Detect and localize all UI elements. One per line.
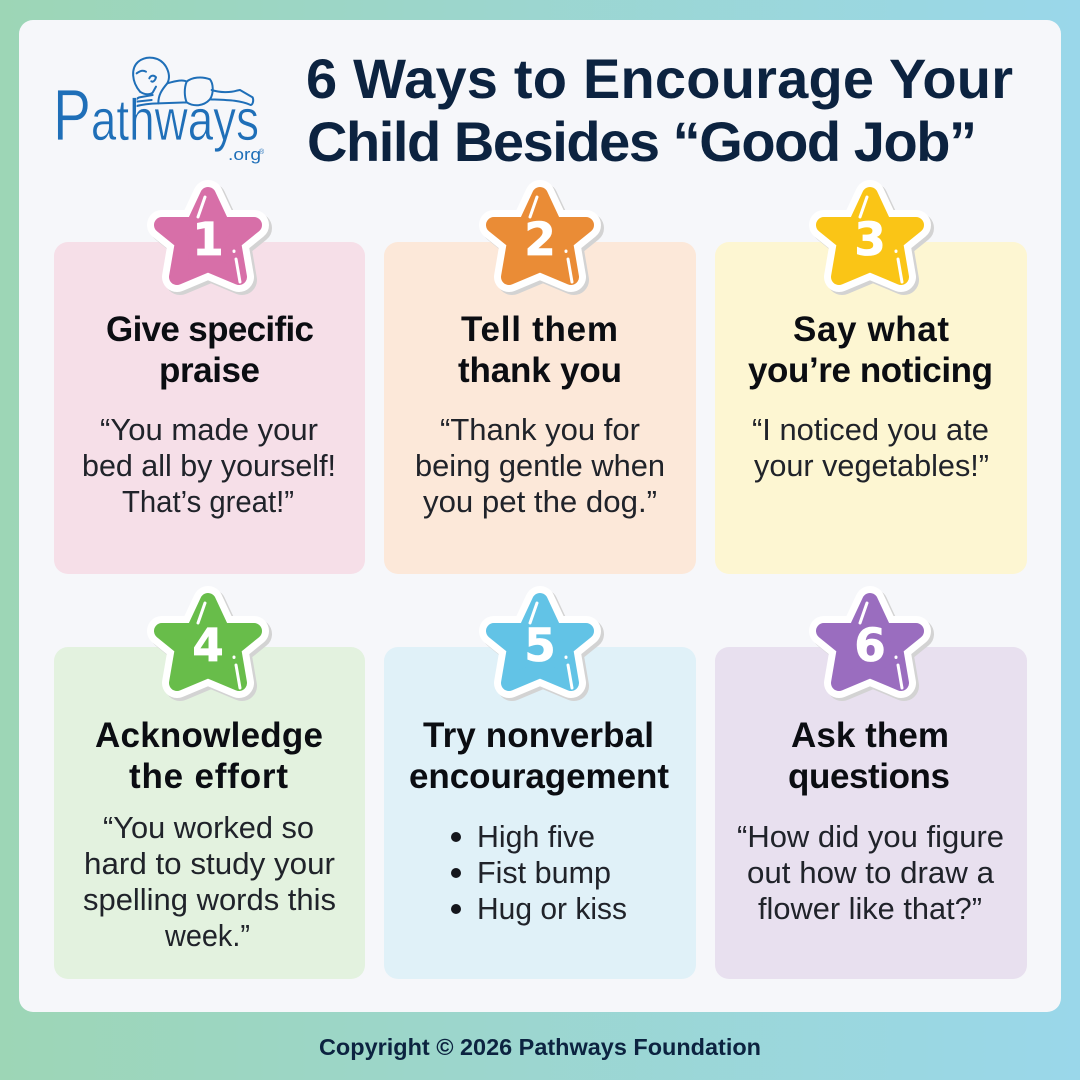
icon: baby lying on tummy	[133, 58, 253, 107]
star 3	[824, 195, 919, 282]
heading: encouragement	[409, 757, 669, 796]
quote: “You worked so	[103, 810, 314, 845]
heading: Give specific	[106, 310, 314, 349]
panel 4: effort	[54, 601, 365, 979]
bullet list: Fist bump	[477, 855, 611, 890]
quote: hard to study your	[84, 846, 335, 881]
heading: Acknowledge	[95, 716, 323, 755]
star 4	[162, 601, 257, 688]
title: Child Besides “Good Job”	[307, 110, 977, 173]
panel 5: nonverbal	[384, 601, 696, 979]
heading	[458, 310, 622, 390]
star 4: 4	[192, 619, 224, 672]
bullet list: High five	[477, 819, 595, 854]
heading: Try nonverbal	[423, 716, 654, 755]
star 6: 6	[854, 619, 886, 672]
quote: your vegetables!”	[754, 448, 989, 483]
star 6	[824, 601, 919, 688]
star 2: 2	[524, 213, 556, 266]
quote: “Thank you for	[440, 412, 640, 447]
copyright footer: Copyright © 2026 Pathways Foundation	[319, 1034, 761, 1060]
heading: the effort	[129, 757, 288, 796]
heading	[409, 716, 669, 796]
star 5: 5	[524, 619, 556, 672]
quote: week.”	[164, 918, 250, 953]
heading: questions	[788, 757, 950, 796]
quote: That’s great!”	[122, 484, 294, 519]
star 5	[494, 601, 589, 688]
logo: Pathways.org	[53, 58, 265, 164]
heading	[95, 716, 323, 796]
heading: you’re noticing	[748, 351, 993, 390]
heading: Say what	[793, 310, 949, 349]
quote: “How did you figure	[737, 819, 1004, 854]
quote	[82, 412, 336, 519]
star 3: 3	[854, 213, 886, 266]
heading	[788, 716, 950, 796]
heading	[748, 310, 993, 390]
star 1	[162, 195, 257, 282]
quote: you pet the dog.”	[423, 484, 657, 519]
quote	[752, 412, 989, 483]
star 2	[494, 195, 589, 282]
heading	[106, 310, 314, 390]
heading: Tell them	[461, 310, 618, 349]
logo registered mark: ®	[259, 148, 265, 156]
quote: bed all by yourself!	[82, 448, 336, 483]
bullet list: Hug or kiss	[477, 891, 627, 926]
quote: being gentle when	[415, 448, 665, 483]
quote: spelling words this	[83, 882, 336, 917]
logo wordmark: Pathways	[53, 76, 259, 156]
quote	[415, 412, 665, 519]
panel 2: thank you	[384, 195, 696, 574]
title	[306, 47, 1013, 173]
panel 1: specific praise	[54, 195, 365, 574]
quote: “You made your	[100, 412, 318, 447]
quote	[83, 810, 336, 953]
quote: out how to draw a	[747, 855, 995, 890]
heading: praise	[159, 351, 260, 390]
heading: thank you	[458, 351, 622, 390]
quote: flower like that?”	[758, 891, 982, 926]
quote: “I noticed you ate	[752, 412, 989, 447]
bullet list	[451, 819, 627, 926]
title: 6 Ways to Encourage Your	[306, 47, 1013, 110]
panel 6: questions	[715, 601, 1027, 979]
star 1: 1	[192, 213, 224, 266]
quote	[737, 819, 1004, 926]
heading: Ask them	[791, 716, 949, 755]
logo .org: .org	[228, 145, 261, 164]
panel 3: noticing	[715, 195, 1027, 574]
